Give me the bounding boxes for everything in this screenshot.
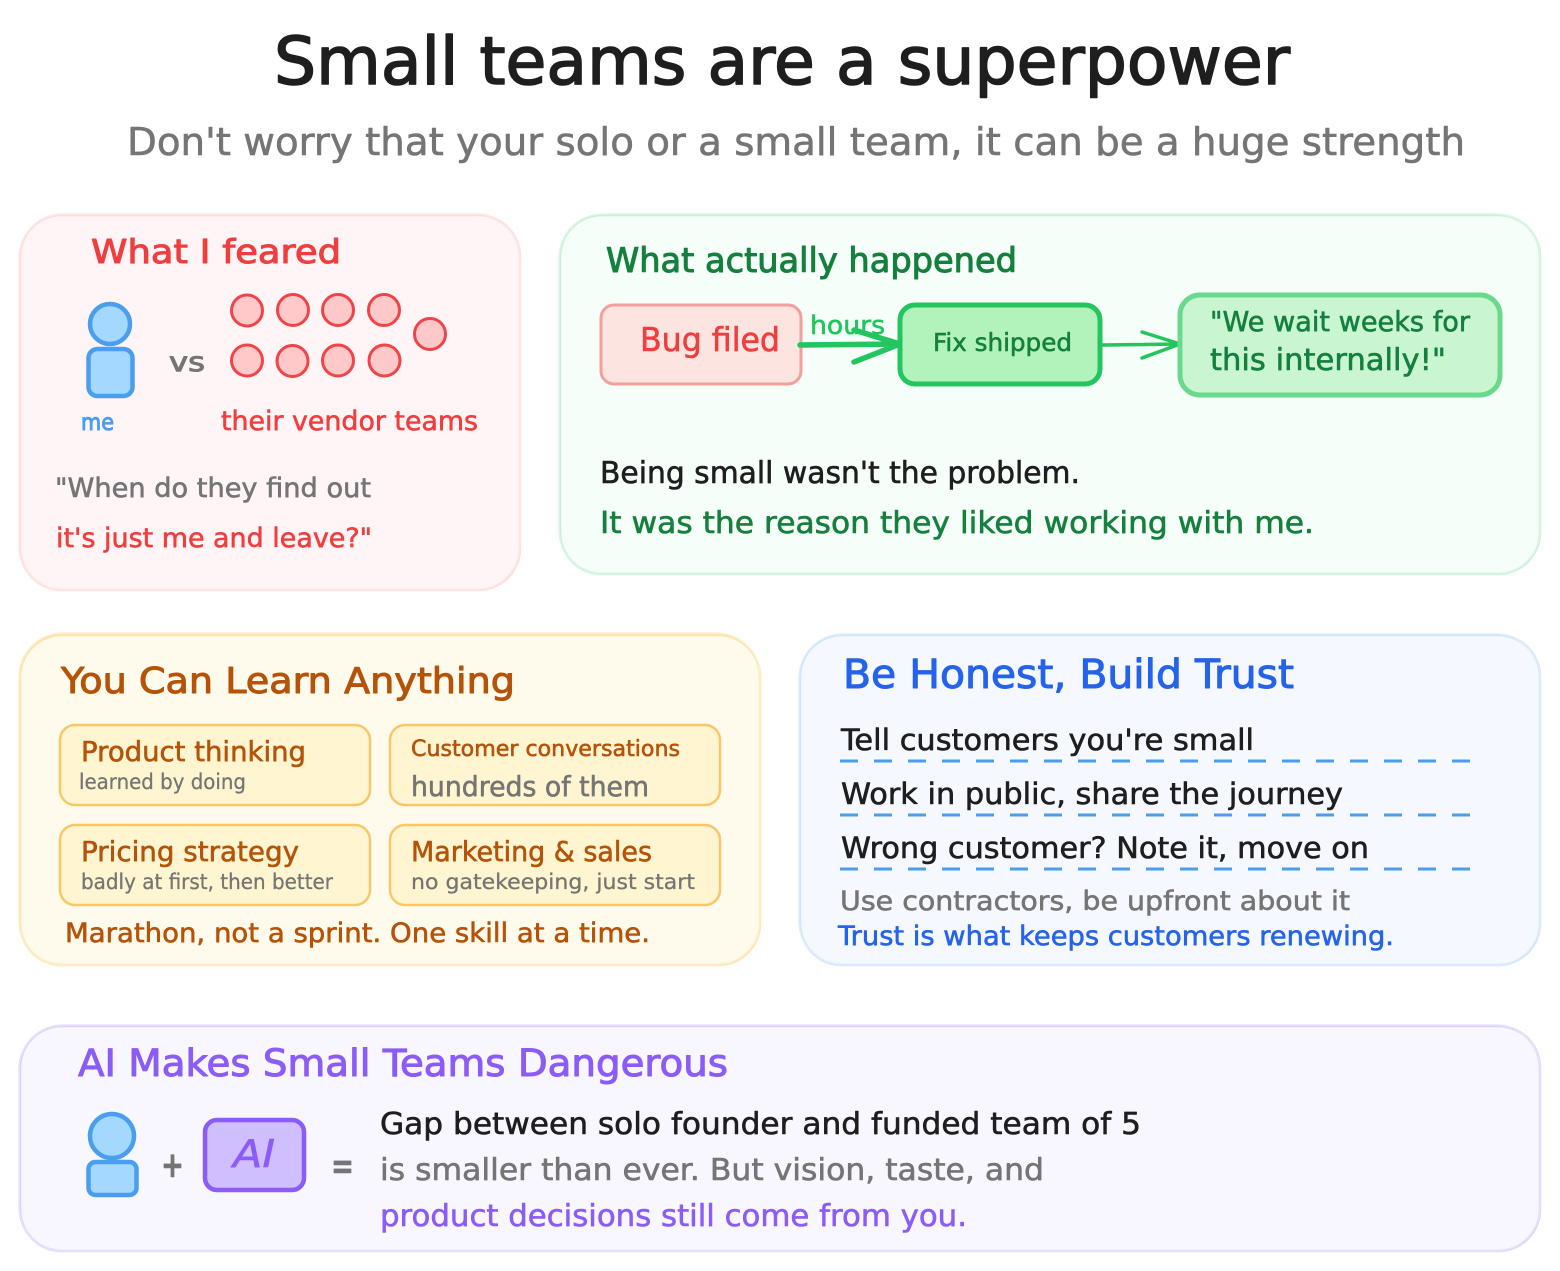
box: customer quote: "We wait weeks for — [1210, 305, 1470, 338]
list item 2: Work in public, share the journey — [841, 777, 1343, 811]
icon: me — [88, 304, 132, 396]
box: AI — [205, 1120, 304, 1190]
box: customer quote — [1180, 295, 1500, 395]
panel: what actually happened — [559, 214, 1540, 574]
text: gap: Gap between solo founder and funded team of 5 — [380, 1107, 1141, 1142]
heading: what I feared: What I feared — [91, 232, 341, 271]
box: fix shipped: Fix shipped — [933, 328, 1072, 357]
label: vs: vs — [169, 347, 205, 378]
label: me: me — [81, 410, 114, 436]
icon: vendor team circles — [232, 294, 446, 376]
box: bug filed: Bug filed — [640, 320, 780, 359]
text: gap — [380, 1107, 1141, 1234]
text: marathon: Marathon, not a sprint. One skill at a time. — [65, 918, 650, 949]
card: pricing strategy: badly at first, then better — [81, 870, 333, 894]
card: pricing strategy: Pricing strategy — [81, 835, 299, 868]
box: AI: AI — [230, 1132, 275, 1176]
box: customer quote: this internally!" — [1210, 343, 1446, 378]
text: contractors: Use contractors, be upfront about it — [840, 886, 1350, 917]
box: fix shipped — [900, 305, 1100, 384]
box: bug filed — [601, 305, 801, 384]
subtitle: Don't worry that your solo or a small team, it can be a huge strength — [127, 120, 1465, 164]
label: their vendor teams: their vendor teams — [221, 406, 478, 437]
text: gap: is smaller than ever. But vision, taste, and — [380, 1153, 1044, 1188]
card: product thinking: learned by doing — [79, 770, 246, 794]
panel: you can learn anything — [19, 633, 760, 965]
heading: AI: AI Makes Small Teams Dangerous — [78, 1042, 728, 1085]
quote — [55, 473, 372, 554]
plus: + — [161, 1145, 184, 1186]
card: customer conversations — [390, 725, 720, 805]
card: customer conversations: Customer conversations — [411, 737, 680, 762]
text: trust: Trust is what keeps customers renewing. — [837, 921, 1394, 952]
text: the reason: It was the reason they liked working with me. — [600, 506, 1314, 541]
list item 1: Tell customers you're small — [840, 723, 1254, 757]
card: marketing and sales: no gatekeeping, just start — [411, 870, 695, 894]
arrow: hours — [800, 311, 900, 362]
text: being small: Being small wasn't the problem. — [600, 456, 1080, 491]
card: product thinking — [60, 725, 370, 805]
quote: it's just me and leave?" — [56, 523, 372, 554]
quote: "When do they find out — [55, 473, 371, 504]
arrow: hours: hours — [810, 311, 885, 341]
heading: you can learn anything: You Can Learn Anything — [60, 661, 515, 702]
arrow: to quote — [1103, 332, 1180, 358]
heading: what actually happened: What actually happened — [606, 241, 1017, 281]
text: gap: product decisions still come from you. — [380, 1199, 967, 1234]
card: marketing and sales: Marketing & sales — [411, 835, 652, 868]
panel: what I feared — [19, 214, 520, 590]
panel: AI makes small teams dangerous — [19, 1025, 1540, 1251]
list item 3: Wrong customer? Note it, move on — [841, 831, 1369, 865]
panel: be honest build trust — [799, 634, 1540, 965]
title: Small teams are a superpower — [274, 23, 1291, 100]
card: pricing strategy — [60, 825, 370, 905]
icon: person — [88, 1114, 136, 1195]
heading: be honest: Be Honest, Build Trust — [843, 652, 1294, 698]
card: product thinking: Product thinking — [81, 735, 306, 768]
card: customer conversations: hundreds of them — [411, 770, 649, 803]
equals: = — [331, 1146, 354, 1187]
card: marketing and sales — [390, 825, 720, 905]
